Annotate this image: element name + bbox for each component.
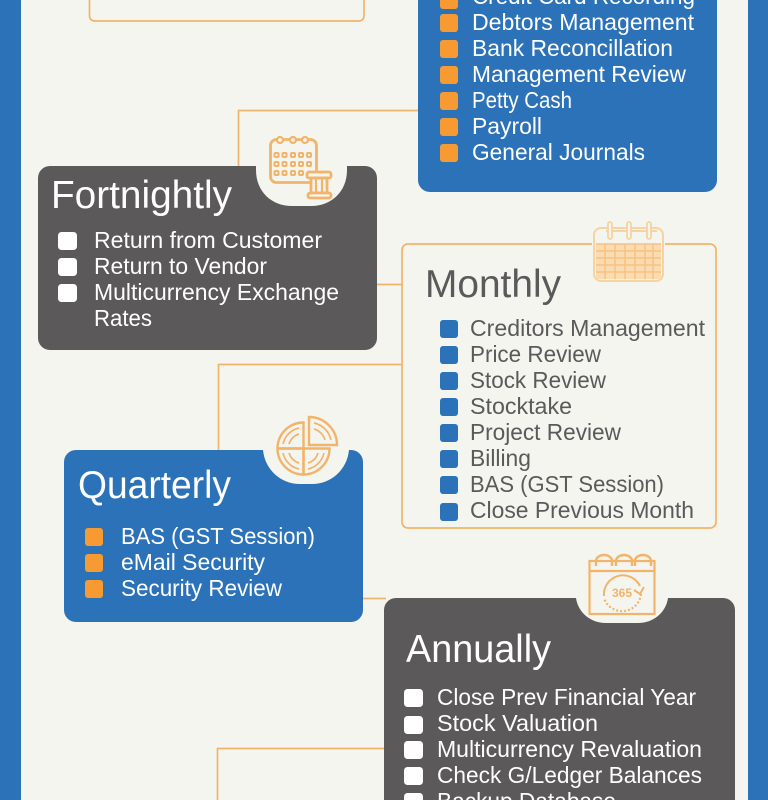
list: monthly tasks: Close Previous Month	[470, 497, 694, 523]
connector: monthly to quarterly	[218, 364, 402, 452]
list: annual tasks	[437, 684, 702, 800]
list: weekly tasks: Payroll	[472, 113, 542, 139]
list: fortnightly tasks: Multicurrency Exchange	[94, 279, 339, 305]
panel: previous outlined box	[90, 0, 364, 21]
list: annual tasks: Check G/Ledger Balances	[437, 762, 702, 788]
connector: weekly to fortnightly	[238, 110, 418, 170]
list: monthly tasks: Project Review	[470, 419, 621, 445]
bullets: monthly	[440, 320, 458, 521]
list: quarterly tasks	[121, 523, 315, 601]
list: annual tasks: Multicurrency Revaluation	[437, 736, 702, 762]
bullets: weekly	[440, 0, 458, 162]
connector: annually to next panel	[218, 748, 386, 800]
list: annual tasks: Close Prev Financial Year	[437, 684, 696, 710]
list: monthly tasks: Billing	[470, 445, 531, 471]
list: weekly tasks: Management Review	[472, 61, 686, 87]
list: annual tasks: Stock Valuation	[437, 710, 598, 736]
right blue border	[748, 0, 768, 800]
list: quarterly tasks: BAS (GST Session)	[121, 523, 315, 549]
list: monthly tasks	[470, 315, 706, 523]
panel: fortnightly	[38, 166, 377, 350]
left blue border	[0, 0, 21, 800]
bullets: fortnightly	[58, 232, 77, 302]
icon: quarter pie chart	[278, 417, 337, 474]
connector: fortnightly to monthly	[377, 284, 403, 286]
heading: fortnightly: Fortnightly	[51, 174, 232, 217]
list: monthly tasks: Price Review	[470, 341, 601, 367]
list: quarterly tasks: Security Review	[121, 575, 282, 601]
list: quarterly tasks: eMail Security	[121, 549, 265, 575]
heading: quarterly: Quarterly	[78, 464, 231, 507]
list: fortnightly tasks	[94, 227, 339, 331]
heading: monthly: Monthly	[425, 263, 561, 306]
list: weekly tasks: Bank Reconcillation	[472, 35, 673, 61]
list: monthly tasks: BAS (GST Session)	[470, 471, 664, 497]
bullets: quarterly	[85, 528, 103, 598]
list: fortnightly tasks: Return to Vendor	[94, 253, 267, 279]
icon: 365 calendar	[590, 555, 654, 614]
list: weekly tasks: General Journals	[472, 139, 645, 165]
list: monthly tasks: Stock Review	[470, 367, 606, 393]
list: monthly tasks: Stocktake	[470, 393, 572, 419]
icon label: 365: 365	[612, 586, 632, 600]
list: fortnightly tasks: Rates	[94, 305, 152, 331]
icon: monthly calendar	[594, 222, 663, 281]
list: weekly tasks	[472, 0, 695, 165]
heading: annually: Annually	[406, 628, 551, 671]
list: monthly tasks: Creditors Management	[470, 315, 706, 341]
panel: quarterly	[64, 450, 363, 622]
panel: annually	[384, 598, 735, 800]
list: weekly tasks: Petty Cash	[472, 87, 572, 113]
list: weekly tasks: Debtors Management	[472, 9, 695, 35]
icon: calendar with columns	[270, 137, 331, 198]
list: fortnightly tasks: Return from Customer	[94, 227, 322, 253]
connector: quarterly to annually	[363, 598, 386, 600]
panel: monthly	[402, 238, 716, 528]
panel: weekly tasks	[418, 0, 717, 192]
bullets: annually	[404, 689, 423, 800]
